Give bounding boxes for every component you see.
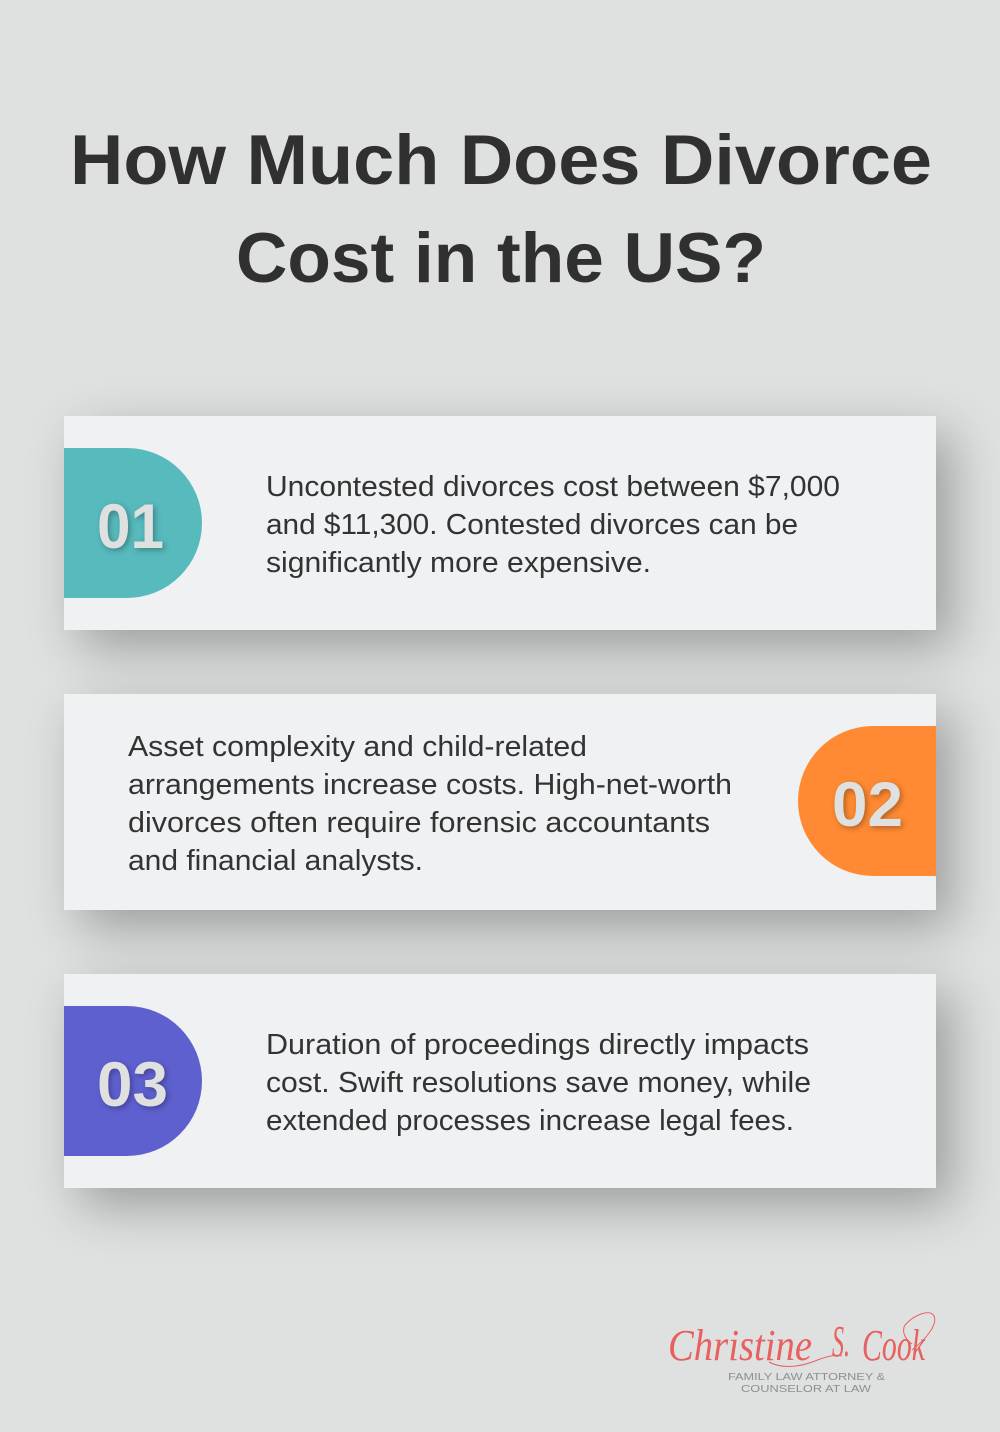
text block 3 xyxy=(266,1029,811,1137)
text block 3: extended processes increase legal fees. xyxy=(266,1105,794,1137)
item 3 xyxy=(64,1006,811,1156)
panel: card 3 background xyxy=(64,974,936,1188)
text block 2: and financial analysts. xyxy=(128,845,423,877)
badge 2 xyxy=(798,726,936,876)
text block 2: arrangements increase costs. High-net-worth xyxy=(128,769,732,801)
title xyxy=(70,120,932,297)
number 01: 01 xyxy=(97,492,164,562)
number 02: 02 xyxy=(832,770,903,840)
title: How Much Does Divorce xyxy=(70,120,932,199)
text block 1: significantly more expensive. xyxy=(266,547,651,579)
text block 2: divorces often require forensic accountants xyxy=(128,807,710,839)
text block 2 xyxy=(128,731,732,877)
badge 3 xyxy=(64,1006,202,1156)
text block 2: Asset complexity and child-related xyxy=(128,731,587,763)
title: Cost in the US? xyxy=(236,218,766,297)
logo tagline: FAMILY LAW ATTORNEY & xyxy=(728,1371,885,1383)
panel: card 2 background xyxy=(64,694,936,910)
logo xyxy=(668,1313,935,1395)
logo tagline xyxy=(728,1371,885,1395)
item 1 xyxy=(64,448,840,598)
text block 1: and $11,300. Contested divorces can be xyxy=(266,509,798,541)
logo signature xyxy=(668,1317,926,1370)
logo signature: Cook xyxy=(862,1321,926,1370)
text block 1: Uncontested divorces cost between $7,000 xyxy=(266,471,840,503)
badge 1 xyxy=(64,448,202,598)
logo signature: Christine xyxy=(668,1321,812,1370)
logo swash xyxy=(769,1313,935,1366)
item 2 xyxy=(128,726,936,877)
text block 3: Duration of proceedings directly impacts xyxy=(266,1029,809,1061)
logo tagline: COUNSELOR AT LAW xyxy=(741,1383,871,1395)
number 03: 03 xyxy=(97,1050,168,1120)
text block 3: cost. Swift resolutions save money, while xyxy=(266,1067,811,1099)
panel: card 1 background xyxy=(64,416,936,630)
logo signature: S. xyxy=(832,1317,850,1366)
text block 1 xyxy=(266,471,840,579)
